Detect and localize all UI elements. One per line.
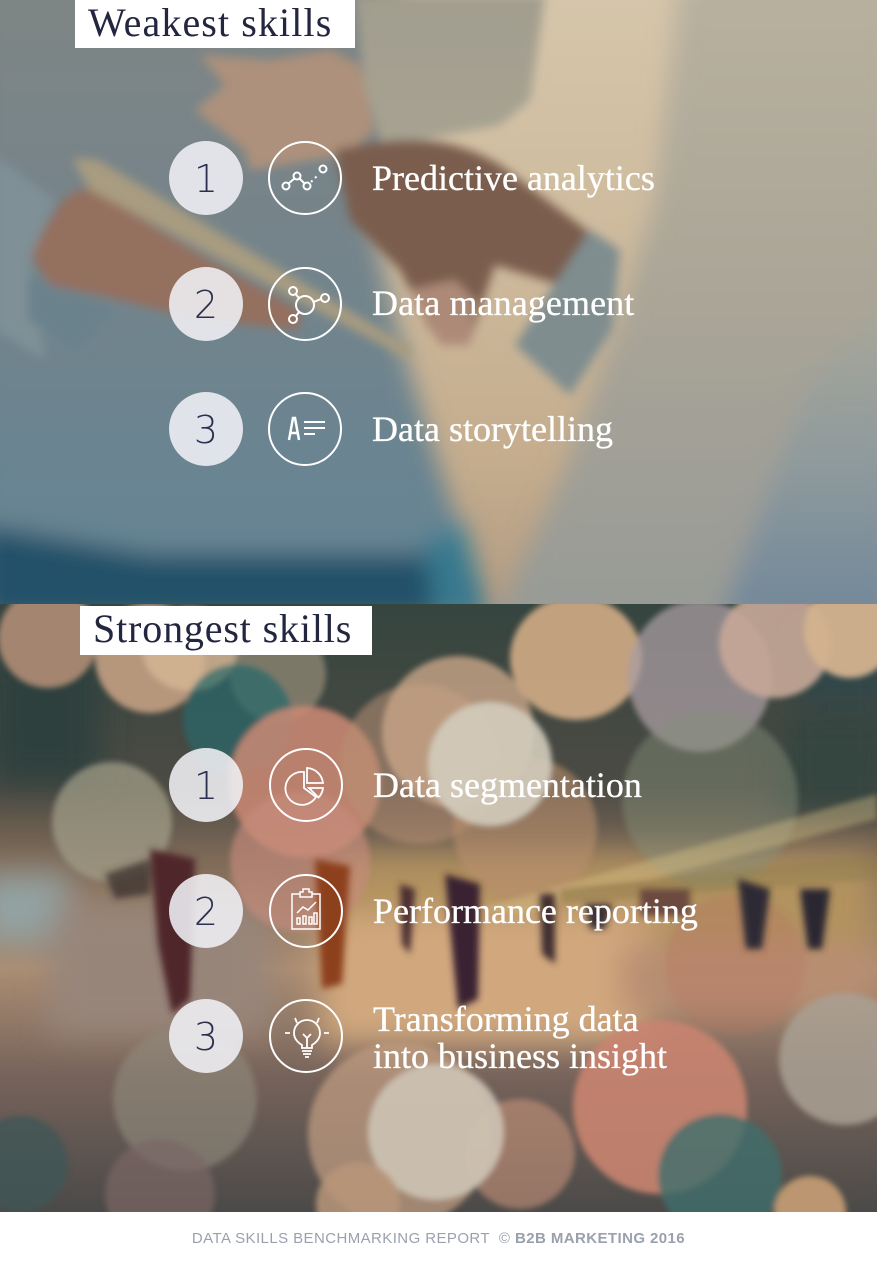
label: data segmentation: Data segmentation	[373, 765, 642, 805]
icon: data management nodes	[268, 267, 342, 341]
number badge 2	[169, 874, 243, 948]
label: data management: Data management	[372, 283, 634, 323]
number badge 3: 3	[194, 408, 218, 452]
number badge 1: 1	[194, 764, 218, 808]
label: data storytelling: Data storytelling	[372, 409, 613, 449]
photo: blurred street with bokeh	[0, 604, 877, 1212]
label: performance reporting: Performance reporting	[373, 891, 698, 931]
number badge 1	[169, 748, 243, 822]
number badge 1	[169, 141, 243, 215]
heading: strongest skills: Strongest skills	[93, 606, 352, 651]
icon: pie chart	[269, 748, 343, 822]
footer	[0, 1212, 877, 1261]
number badge 2: 2	[194, 283, 218, 327]
label: predictive analytics: Predictive analytics	[372, 158, 655, 198]
icon: light bulb	[269, 999, 343, 1073]
number badge 2	[169, 267, 243, 341]
number badge 3: 3	[194, 1015, 218, 1059]
footer: DATA SKILLS BENCHMARKING REPORT © B2B MARKETING 2016	[192, 1230, 685, 1247]
number badge 3	[169, 999, 243, 1073]
blurred pedestrians	[105, 849, 830, 1014]
light streaks	[480, 794, 877, 914]
label: transforming data into business insight: Transforming data	[373, 999, 639, 1039]
icon: predictive analytics line	[268, 141, 342, 215]
label: transforming data into business insight	[373, 999, 667, 1076]
number badge 1: 1	[194, 157, 218, 201]
icon: data storytelling text	[268, 392, 342, 466]
photo: hands with tablet	[0, 0, 877, 604]
heading: weakest skills: Weakest skills	[88, 0, 332, 45]
number badge 2: 2	[194, 890, 218, 934]
number badge 3	[169, 392, 243, 466]
icon: performance report clipboard	[269, 874, 343, 948]
label: transforming data into business insight: into business insight	[373, 1036, 667, 1076]
